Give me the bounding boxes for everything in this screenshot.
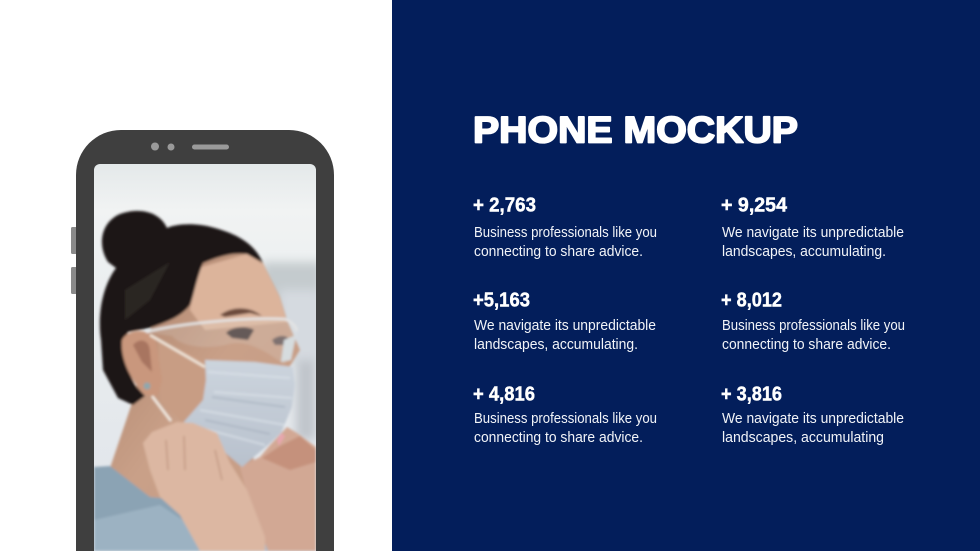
stat block: 9,254: landscapes, accumulating. xyxy=(722,244,886,260)
stat block: 5,163: We navigate its unpredictable xyxy=(474,318,656,334)
stat block: 2,763: connecting to share advice. xyxy=(474,244,643,260)
stat block: 3,816: landscapes, accumulating xyxy=(722,430,884,446)
stat block: 3,816: + 3,816 xyxy=(721,384,782,406)
back hand xyxy=(240,427,316,551)
front hand xyxy=(143,422,265,551)
scrubs xyxy=(94,464,183,521)
stat block: 8,012 xyxy=(721,290,905,353)
phone camera and speaker xyxy=(151,142,229,150)
stat block: 5,163: +5,163 xyxy=(473,290,530,312)
stat block: 4,816 xyxy=(473,384,657,446)
stat block: 9,254: We navigate its unpredictable xyxy=(722,225,904,241)
title: PHONE MOCKUP xyxy=(473,110,798,150)
eyebrow and eye xyxy=(220,308,262,317)
ear straps xyxy=(150,335,205,367)
stat block: 3,816: We navigate its unpredictable xyxy=(722,411,904,427)
stat block: 4,816: connecting to share advice. xyxy=(474,430,643,446)
icon: phone side buttons xyxy=(71,227,77,294)
surgical mask xyxy=(183,360,295,467)
phone body xyxy=(76,130,334,551)
phone mockup xyxy=(71,130,334,551)
glasses xyxy=(155,320,294,360)
ear xyxy=(122,331,162,396)
stat block: 3,816 xyxy=(721,384,904,446)
stat block: 9,254 xyxy=(721,194,904,260)
stat block: 4,816: + 4,816 xyxy=(473,384,535,406)
panel: navy background xyxy=(392,0,980,551)
stat block: 8,012: + 8,012 xyxy=(721,290,782,312)
stat block: 9,254: + 9,254 xyxy=(721,194,788,216)
stat block: 8,012: connecting to share advice. xyxy=(722,337,891,353)
stat block: 8,012: Business professionals like you xyxy=(722,318,905,334)
photo: woman fitting a surgical mask xyxy=(94,164,322,551)
stat block: 5,163 xyxy=(473,290,656,353)
stat block: 2,763: + 2,763 xyxy=(473,194,536,216)
stat block: 2,763 xyxy=(473,194,657,260)
stat block: 5,163: landscapes, accumulating. xyxy=(474,337,638,353)
stat block: 4,816: Business professionals like you xyxy=(474,411,657,427)
stat block: 2,763: Business professionals like you xyxy=(474,225,657,241)
hair xyxy=(100,211,263,405)
neck and face xyxy=(110,250,300,510)
